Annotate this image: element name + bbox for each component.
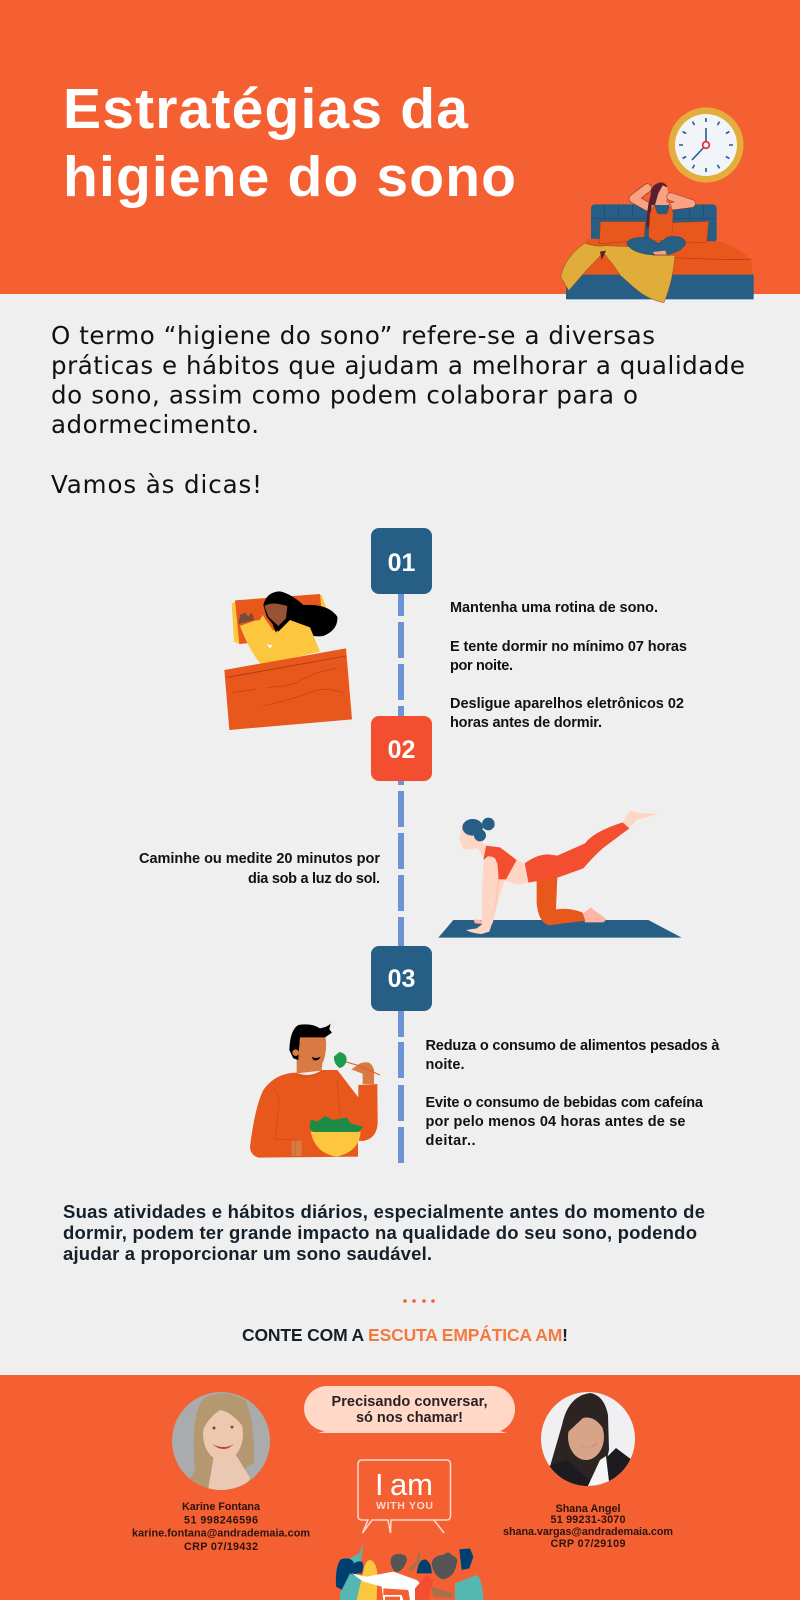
step 02 text: Caminhe ou medite 20 minutos por: [139, 851, 380, 867]
logo: I am with you: am: [390, 1467, 433, 1502]
illustration: woman exercising on a mat: [438, 811, 682, 938]
logo: I am with you: [358, 1460, 450, 1533]
conclusion text: ajudar a proporcionar um sono saudável.: [63, 1243, 432, 1264]
timeline dashed line: [398, 594, 404, 1163]
Shana contact text: CRP 07/29109: [550, 1538, 626, 1550]
intro text: do sono, assim como podem colaborar para o: [51, 380, 638, 410]
intro text: [51, 321, 745, 499]
speech bubble: Precisando conversar,: [332, 1394, 488, 1410]
Shana contact text: Shana Angel: [556, 1503, 620, 1515]
speech bubble: [304, 1386, 515, 1433]
illustration: sleeping woman: [224, 591, 352, 730]
title: higiene do sono: [63, 145, 516, 209]
call to action line: CONTE COM A ESCUTA EMPÁTICA AM!: [242, 1324, 568, 1345]
step 03 text: [426, 1038, 720, 1149]
step 03 text: Reduza o consumo de alimentos pesados à: [426, 1038, 720, 1054]
illustration: group of friends hugging: [336, 1543, 483, 1600]
step 01 text: Desligue aparelhos eletrônicos 02: [450, 696, 684, 712]
Shana contact text: shana.vargas@andrademaia.com: [503, 1526, 673, 1538]
step 01 badge: 01: [388, 549, 415, 577]
intro text: adormecimento.: [51, 410, 259, 439]
Karine contact text: [132, 1501, 310, 1553]
step 03 text: por pelo menos 04 horas antes de se: [426, 1114, 686, 1130]
intro text: O termo “higiene do sono” refere-se a diversas: [51, 321, 655, 350]
logo: I am with you: I: [375, 1467, 384, 1502]
header band: [0, 0, 800, 294]
photo: Karine Fontana: [172, 1392, 270, 1490]
Karine contact text: CRP 07/19432: [184, 1541, 258, 1553]
footer band: [0, 1375, 800, 1600]
Shana contact text: [503, 1503, 673, 1550]
logo: I am with you: WITH YOU: [376, 1500, 433, 1512]
step 02 badge: [371, 716, 432, 781]
speech bubble: só nos chamar!: [356, 1410, 463, 1426]
step 03 text: deitar..: [426, 1133, 476, 1149]
step 01 text: horas antes de dormir.: [450, 715, 602, 731]
Karine contact text: karine.fontana@andrademaia.com: [132, 1528, 310, 1540]
intro text: práticas e hábitos que ajudam a melhorar a qualidade: [51, 351, 745, 380]
step 02 text: [139, 851, 380, 887]
step 01 text: E tente dormir no mínimo 07 horas: [450, 639, 687, 655]
conclusion text: [63, 1201, 705, 1264]
Shana contact text: 51 99231-3070: [550, 1514, 626, 1526]
step 01 text: por noite.: [450, 658, 513, 674]
icon: wall clock: [668, 108, 744, 182]
step 03 badge: 03: [388, 965, 415, 993]
step 03 badge: [371, 946, 432, 1011]
intro text: Vamos às dicas!: [51, 470, 262, 499]
illustration: woman waking up in bed: [561, 182, 754, 303]
title: Estratégias da: [63, 77, 469, 141]
illustration: man eating salad: [250, 1023, 380, 1158]
Karine contact text: Karine Fontana: [182, 1501, 261, 1513]
decorative dots: [403, 1299, 435, 1303]
step 03 text: Evite o consumo de bebidas com cafeína: [426, 1095, 704, 1111]
step 01 text: [450, 600, 687, 731]
step 02 text: dia sob a luz do sol.: [248, 871, 380, 887]
title: [63, 77, 516, 209]
Karine contact text: 51 998246596: [184, 1514, 258, 1526]
step 03 text: noite.: [426, 1057, 464, 1073]
step 02 badge: 02: [388, 736, 415, 764]
conclusion text: Suas atividades e hábitos diários, especialmente antes do momento de: [63, 1201, 705, 1222]
conclusion text: dormir, podem ter grande impacto na qualidade do seu sono, podendo: [63, 1222, 697, 1243]
photo: Shana Angel: [540, 1390, 636, 1490]
step 01 badge: [371, 528, 432, 594]
step 01 text: Mantenha uma rotina de sono.: [450, 600, 658, 616]
